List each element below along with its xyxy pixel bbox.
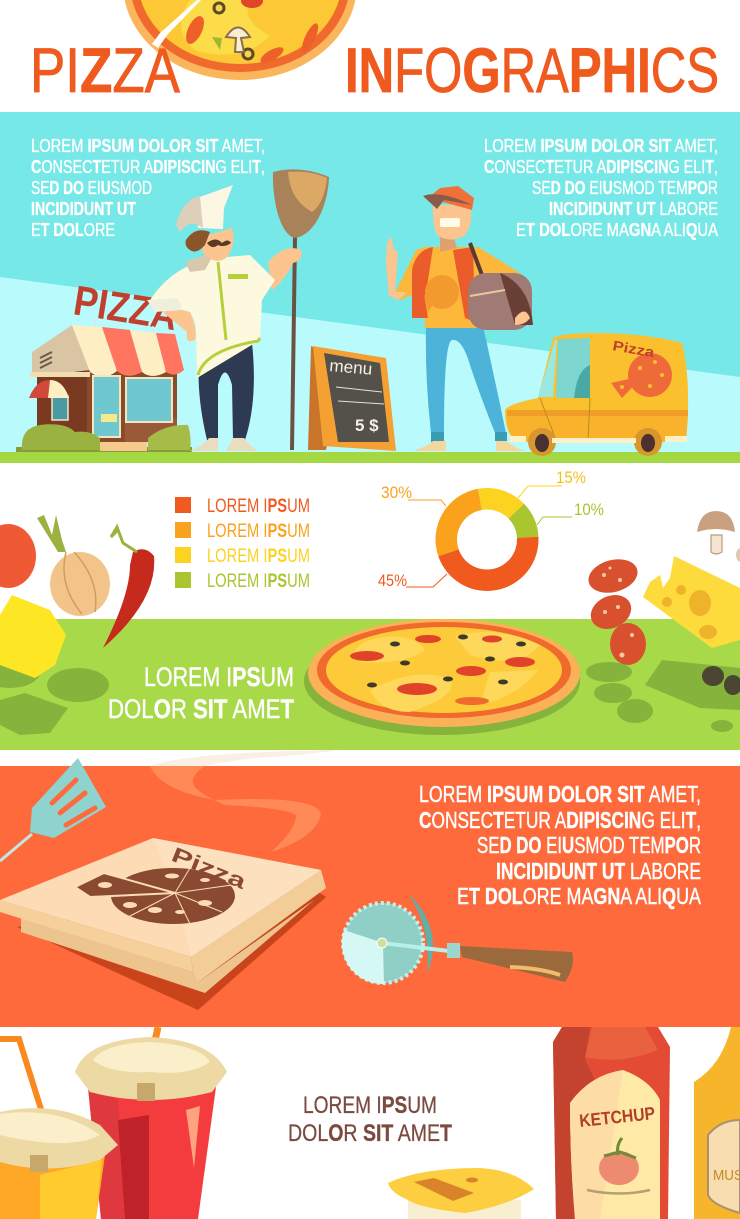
- panel: pizzeria and delivery scene: [0, 112, 740, 463]
- text block: [419, 781, 702, 909]
- steam: [150, 766, 321, 852]
- text block: right: CONSECTETUR ADIPISCING ELIT,: [484, 157, 718, 177]
- box logo: Pizza: [168, 843, 249, 894]
- text block: right: SED DO EIUSMOD TEMPOR: [532, 178, 718, 198]
- illustration: pizza cutter: [342, 893, 573, 984]
- illustration: delivery van: [505, 333, 688, 456]
- illustration: red cup: [75, 1027, 227, 1219]
- heading: lorem ipsum dolor sit amet: [108, 662, 294, 724]
- illustration: menu board: [308, 346, 396, 451]
- title: INFOGRAPHICS: INFOGRAPHICS: [345, 36, 719, 106]
- heading: lorem ipsum dolor sit amet: LOREM IPSUM: [144, 662, 294, 692]
- text block: INCIDIDUNT UT LABORE: [496, 858, 701, 884]
- illustration: delivery man: [386, 186, 533, 451]
- title: PIZZA: PIZZA: [30, 36, 180, 106]
- text block: left: LOREM IPSUM DOLOR SIT AMET,: [31, 136, 265, 156]
- illustration: cut pizza at top: [123, 0, 357, 80]
- heading: lorem ipsum dolor sit amet: DOLOR SIT AMET: [108, 694, 294, 724]
- legend: LOREM IPSUM: [207, 496, 310, 517]
- text block: ET DOLORE MAGNA ALIQUA: [457, 883, 702, 909]
- illustration: yellow bell pepper: [0, 595, 66, 678]
- illustration: tomato: [0, 524, 36, 588]
- donut chart: 45%: [378, 571, 407, 590]
- table shadows: [0, 627, 740, 735]
- donut chart: 15%: [556, 468, 586, 487]
- illustration: spatula: [0, 758, 106, 861]
- shop sign: PIZZA: [71, 276, 181, 339]
- illustration: dipping sauce cup: [388, 1168, 534, 1219]
- legend: [175, 496, 310, 592]
- panel: ingredients and pizza: [0, 468, 740, 750]
- donut chart: 10%: [574, 500, 604, 519]
- illustration: onion: [37, 515, 110, 616]
- illustration: menu board: menu: [329, 356, 373, 379]
- illustration: pizza shop: [16, 276, 192, 452]
- legend: LOREM IPSUM: [207, 571, 310, 592]
- text block: right: LOREM IPSUM DOLOR SIT AMET,: [484, 136, 718, 156]
- illustration: olives: [702, 666, 740, 695]
- text block: left: ET DOLORE: [31, 220, 115, 240]
- heading: lorem ipsum dolor sit amet: DOLOR SIT AMET: [288, 1120, 452, 1147]
- donut chart: 30%: [381, 483, 412, 502]
- heading: lorem ipsum dolor sit amet: [288, 1092, 452, 1147]
- illustration: cheese wedge: [643, 556, 740, 648]
- legend: LOREM IPSUM: [207, 546, 310, 567]
- van logo: [611, 337, 672, 398]
- illustration: chef with pizza peel: [147, 169, 329, 451]
- illustration: ketchup bottle: [553, 1027, 670, 1219]
- text block: left: SED DO EIUSMOD: [31, 178, 152, 198]
- heading: lorem ipsum dolor sit amet: LOREM IPSUM: [303, 1092, 437, 1119]
- illustration: chili pepper: [103, 527, 154, 648]
- text block: right: ET DOLORE MAGNA ALIQUA: [516, 220, 718, 240]
- text block: right: INCIDIDUNT UT LABORE: [549, 199, 718, 219]
- legend: LOREM IPSUM: [207, 521, 310, 542]
- box logo: [75, 843, 249, 924]
- green table background: [0, 619, 740, 750]
- text block: left: CONSECTETUR ADIPISCING ELIT,: [31, 157, 265, 177]
- header panel: [30, 0, 719, 106]
- panel: drinks and sauces: [0, 1027, 740, 1219]
- van logo: Pizza: [611, 337, 656, 360]
- text block: SED DO EIUSMOD TEMPOR: [477, 832, 701, 858]
- text block: LOREM IPSUM DOLOR SIT AMET,: [419, 781, 701, 807]
- illustration: pizza box: [0, 838, 326, 1010]
- text block: left: INCIDIDUNT UT: [31, 199, 136, 219]
- scene background: [0, 112, 740, 463]
- donut chart: [378, 468, 604, 591]
- illustration: ketchup bottle: KETCHUP: [578, 1103, 656, 1131]
- text block: right: [484, 136, 718, 240]
- faint steam over white band: [150, 750, 340, 766]
- illustration: pepperoni slices: [585, 554, 646, 665]
- illustration: large pizza: [308, 619, 580, 727]
- illustration: menu board: 5 $: [355, 416, 379, 435]
- pizza peel: [273, 169, 329, 450]
- illustration: mushrooms: [697, 511, 740, 562]
- illustration: orange cup: [0, 1039, 118, 1219]
- text block: left: [31, 136, 265, 240]
- text block: CONSECTETUR ADIPISCING ELIT,: [419, 807, 701, 833]
- illustration: mustard bottle: [694, 1027, 740, 1219]
- orange background: [0, 766, 740, 1027]
- panel: orange pizza box section: [0, 750, 740, 1027]
